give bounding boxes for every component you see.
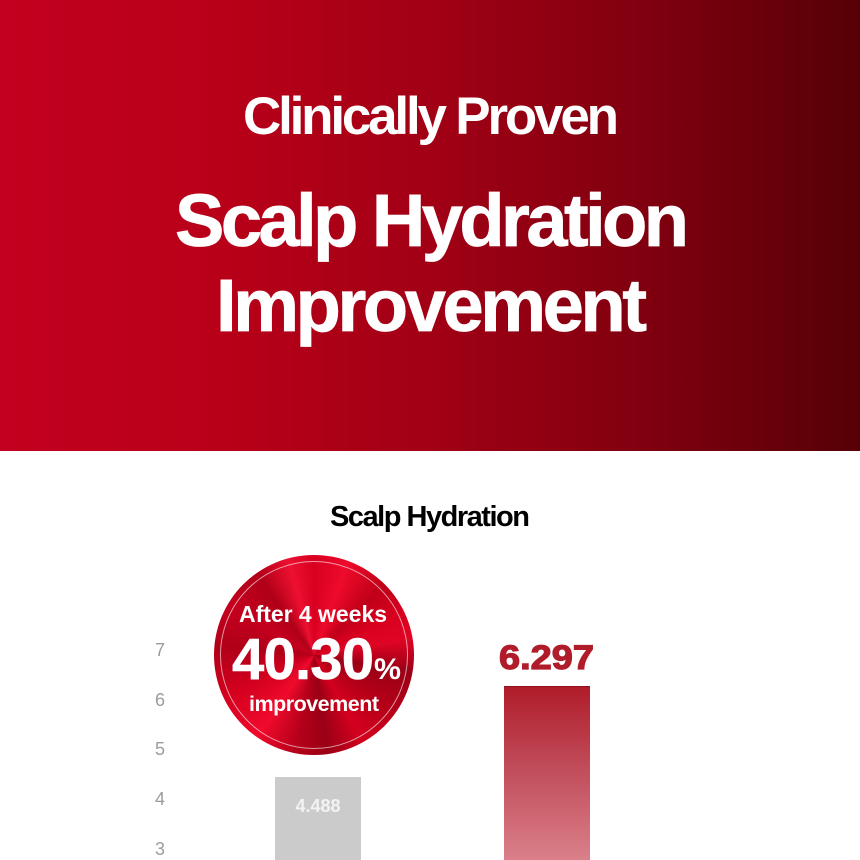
- y-axis labels: 3: [155, 839, 165, 859]
- y-axis labels: 4: [155, 789, 165, 809]
- y-axis labels: 7: [155, 640, 165, 660]
- y-axis labels: 5: [155, 739, 165, 759]
- badge: 40.30% improvement after 4 weeks: [214, 555, 414, 755]
- bar: after, 6.297: [504, 686, 590, 860]
- badge text: %: [374, 653, 401, 686]
- header banner: [0, 0, 860, 451]
- badge text: After 4 weeks: [239, 601, 387, 627]
- badge inner ring: [220, 561, 408, 749]
- y-axis labels: [155, 640, 165, 859]
- chart heading: Scalp Hydration: [330, 501, 530, 533]
- header title: Improvement: [216, 264, 647, 347]
- badge text: 40.30: [232, 627, 374, 692]
- header title: Scalp Hydration: [175, 179, 689, 262]
- bar value: 6.297: 6.297: [499, 639, 594, 677]
- bar value: 4.488: 4.488: [295, 796, 341, 816]
- y-axis labels: 6: [155, 690, 165, 710]
- badge text: [232, 601, 401, 716]
- header title: Clinically Proven: [243, 87, 619, 146]
- header title: [175, 87, 689, 347]
- badge text: improvement: [249, 692, 379, 716]
- bar: before, 4.488: [275, 777, 361, 860]
